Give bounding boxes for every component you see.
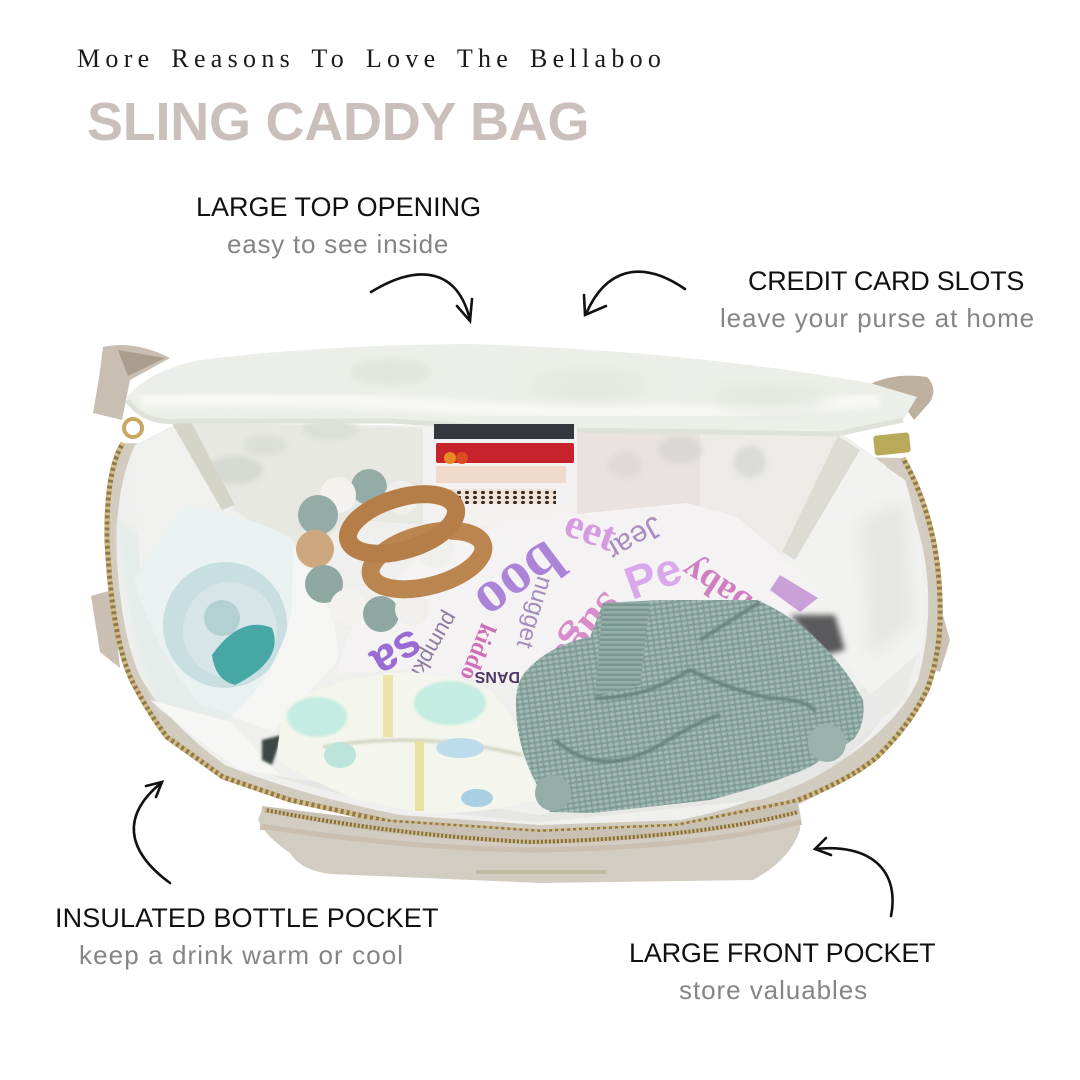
callout: large front pocket [629,938,935,1005]
callout: large front pocket: LARGE FRONT POCKET [629,938,935,968]
wipes package: Jear [601,509,668,567]
bag interior lining [117,422,928,825]
callout: credit card slots: CREDIT CARD SLOTS [748,266,1024,296]
wipes package: nugget [511,573,558,652]
callout: credit card slots [720,266,1035,333]
wipes package: eet [559,500,623,561]
insulated bottle pocket with bottle [134,507,338,765]
callout: credit card slots: leave your purse at home [720,303,1035,333]
front pocket [258,802,802,883]
folded diapers [277,673,537,813]
title: SLING CADDY BAG [87,92,589,152]
icon: credit cards in slots [423,424,577,526]
callout: large top opening: easy to see inside [227,229,449,259]
wipes package: Pe [618,541,688,609]
arrow: credit card slots [584,272,685,315]
hardware: ring and gold tab [124,419,911,456]
wipes package: baby [674,550,759,625]
callout: insulated bottle pocket: INSULATED BOTTLE POCKET [55,903,439,933]
wipes package: boo [464,528,578,637]
top flap [127,344,917,434]
callout: insulated bottle pocket: keep a drink warm or cool [79,940,404,970]
arrow: insulated bottle pocket [134,782,170,883]
wipes package: pumpkin [400,608,463,692]
wipes package [338,500,845,701]
straps and side tabs [91,345,950,672]
arrow: large top opening [371,274,472,321]
bag body with zippers [107,443,940,833]
teether toy [296,469,490,632]
knit blanket [516,600,864,813]
callout: large top opening: LARGE TOP OPENING [196,192,481,222]
wipes package: DANS [474,668,520,685]
callout: large front pocket: store valuables [679,975,868,1005]
wipes package: kiddo [454,620,501,684]
eyebrow heading: More Reasons To Love The Bellaboo [77,44,666,73]
wipes package: sugar [527,584,636,701]
arrow: large front pocket [815,838,893,916]
callout: large top opening [196,192,481,259]
callout: insulated bottle pocket [55,903,439,970]
wipes package: sa [362,619,433,690]
back panel with leopard lining [170,420,860,560]
